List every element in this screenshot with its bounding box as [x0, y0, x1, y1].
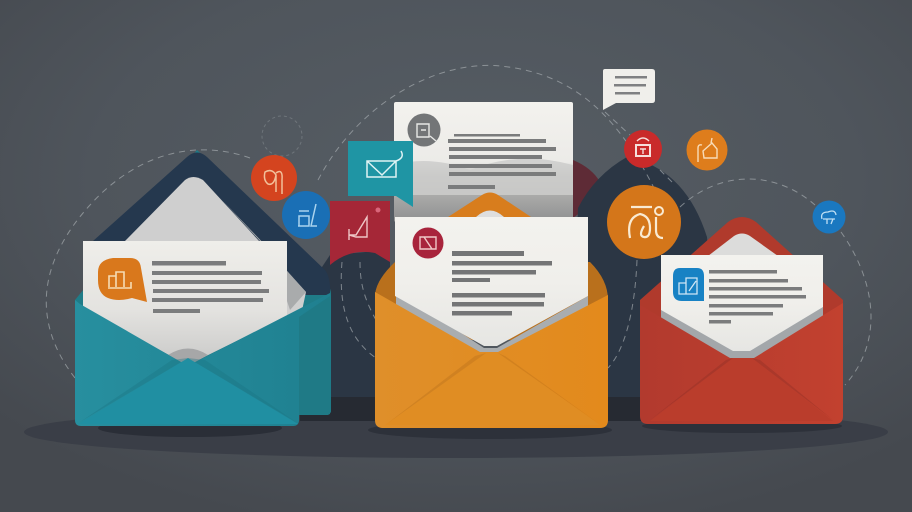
back paper lines [448, 134, 556, 189]
icon: orange-red circle [251, 155, 297, 201]
icon: orange small circle [686, 130, 728, 170]
front paper [395, 217, 588, 346]
icon: teal banner [348, 141, 413, 207]
crimson icon [412, 228, 444, 258]
gray strip [661, 305, 823, 360]
gray fold [168, 348, 208, 366]
ground shadow [24, 406, 888, 458]
dark navy backdrop shapes [300, 157, 712, 421]
icon: blue circle [282, 191, 330, 239]
dashed orbit lines [46, 65, 871, 385]
text lines [152, 261, 269, 313]
gray strip [396, 290, 588, 358]
back paper [394, 102, 573, 222]
inner sheet behind [125, 177, 306, 320]
envelope: red [640, 217, 843, 424]
teal pocket [75, 293, 331, 426]
envelope: teal [75, 150, 331, 426]
red flap [640, 217, 843, 340]
orange speech icon [98, 258, 147, 302]
icon: crimson banner [330, 201, 390, 265]
front paper lines [452, 251, 552, 316]
orange pocket [375, 292, 608, 428]
teal flap [93, 152, 330, 295]
icon: big orange circle [607, 185, 681, 259]
blue icon [673, 268, 704, 301]
orange flap [448, 192, 531, 217]
red paper lines [709, 270, 806, 324]
back paper icon [408, 114, 440, 146]
red pocket [640, 303, 843, 424]
orange back [375, 262, 608, 340]
back paper landscape [394, 159, 573, 195]
red paper [661, 255, 823, 351]
teal back panel [75, 150, 331, 415]
front paper [83, 241, 287, 365]
icon: red lock circle [624, 130, 662, 168]
envelope: orange with back paper [375, 102, 608, 428]
inner sheet [708, 234, 778, 256]
icon: blue small circle [812, 200, 846, 234]
icon: speech bubble [603, 69, 655, 110]
